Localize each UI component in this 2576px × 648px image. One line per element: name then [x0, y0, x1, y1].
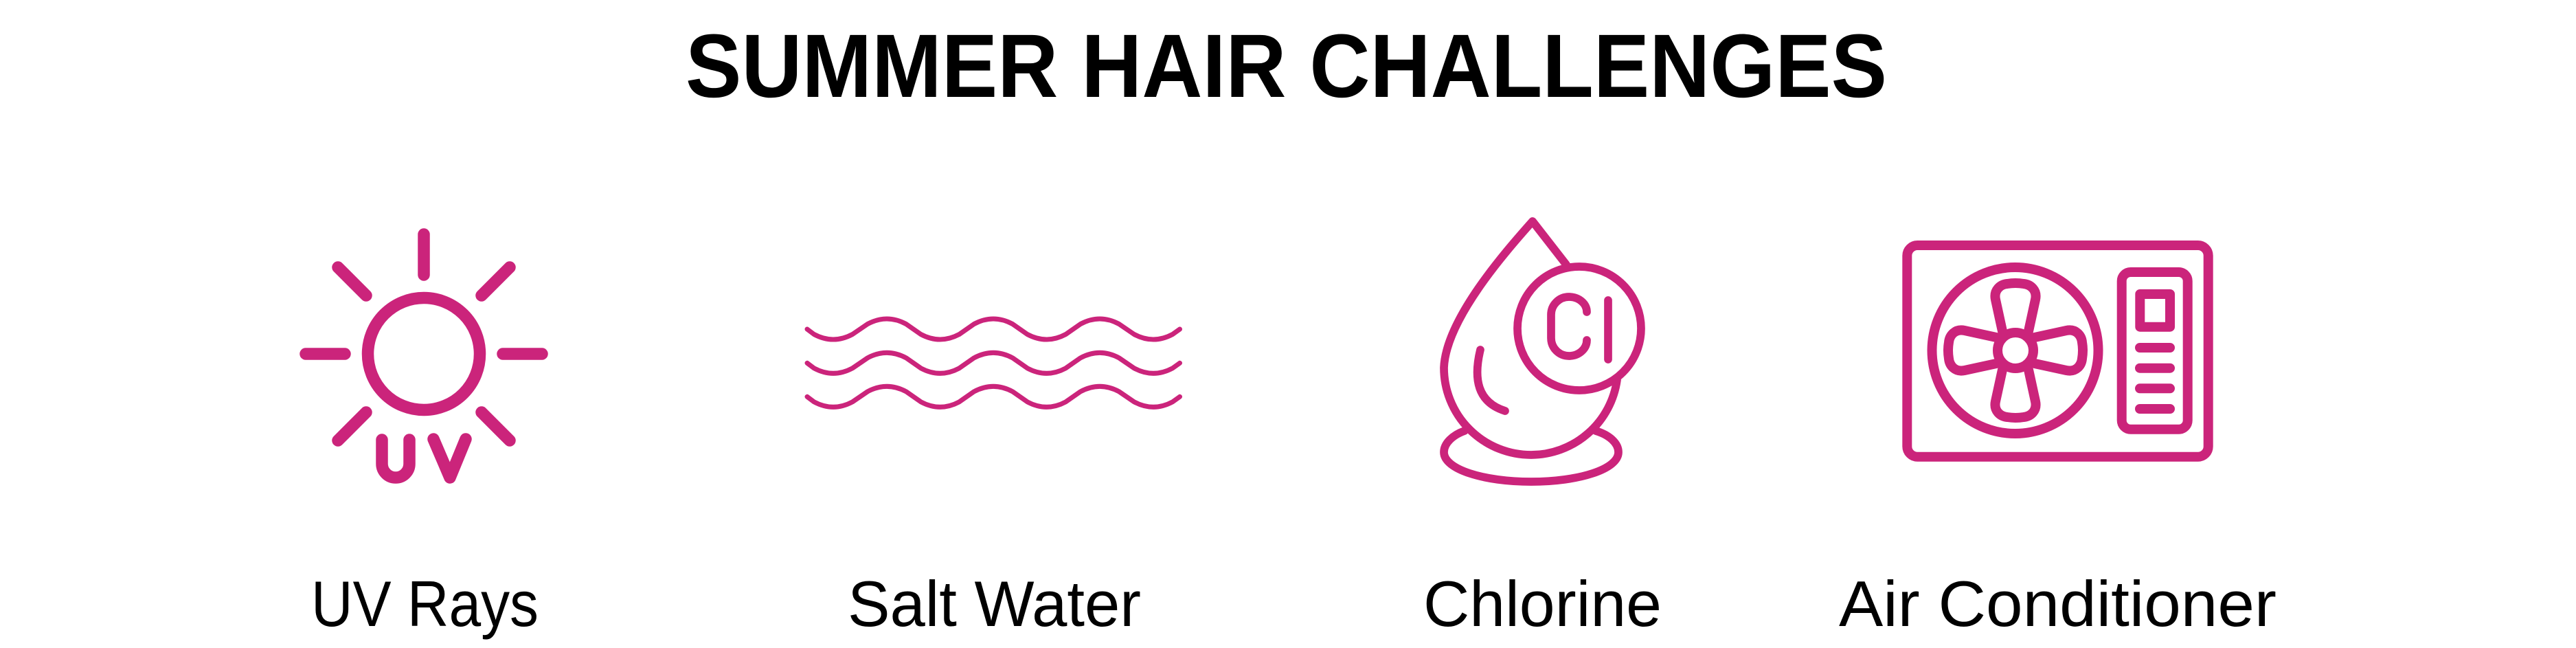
- panel: air conditioner: [1839, 245, 2276, 640]
- label: Salt Water: Salt Water: [848, 568, 1141, 640]
- title: SUMMER HAIR CHALLENGES: [686, 15, 1887, 116]
- label: Chlorine: Chlorine: [1423, 568, 1662, 640]
- icon: air conditioner unit: [1907, 245, 2208, 457]
- icon: sun with UV: [306, 234, 542, 478]
- icon: three waves: [807, 319, 1180, 407]
- panel: chlorine: [1423, 221, 1662, 640]
- label: UV Rays: UV Rays: [311, 568, 539, 640]
- icon: water drop with Cl: [1444, 221, 1641, 482]
- panel: salt water: [807, 319, 1180, 640]
- panel: UV rays: [306, 234, 542, 640]
- label: Air Conditioner: Air Conditioner: [1839, 568, 2276, 640]
